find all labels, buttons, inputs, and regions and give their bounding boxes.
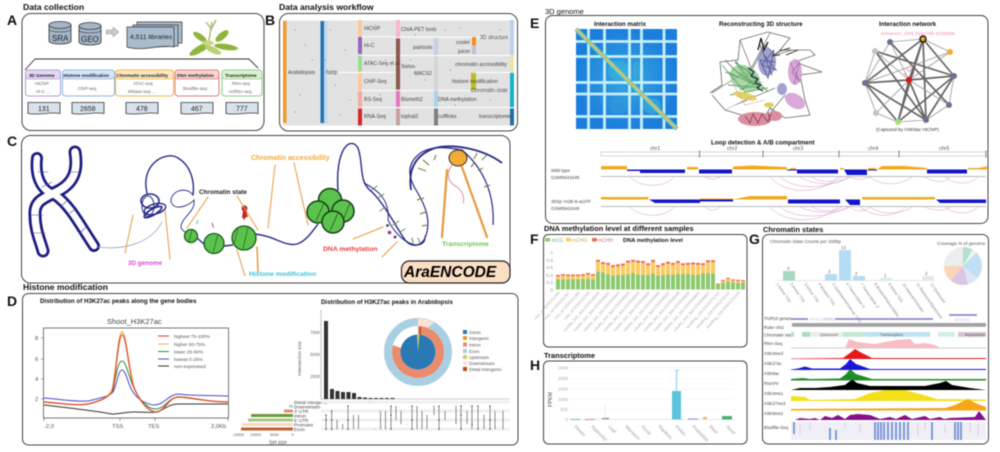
label: chromatin state: Chromatin state [199, 189, 247, 196]
letter B: B [265, 12, 275, 28]
axis labels: 0 [550, 288, 553, 294]
letter E: E [530, 15, 539, 31]
workflow labels: chromatin accessibility [455, 62, 507, 68]
box: chromatin accessibility: ATAC-seq [133, 81, 153, 86]
panel G frame [762, 234, 988, 444]
letter C: C [7, 133, 17, 149]
axis labels: 0.8 [546, 258, 553, 264]
axis labels: 0.2 [546, 280, 553, 286]
H3K27me3 track [791, 399, 986, 410]
workflow labels: tophat2 [401, 114, 418, 120]
bar chart: chromatin state counts: 4 [787, 266, 790, 271]
panel B frame [280, 14, 518, 131]
upset chart: set size bars [233, 400, 328, 446]
workflow labels: BS-Seq [364, 97, 382, 103]
genome browser tracks: Chromatin state [764, 332, 795, 338]
bar chart: chromatin state counts: 2 [925, 271, 928, 276]
track: wild-type compartments and loops: GSM5941648 [551, 175, 580, 180]
bar chart: chromatin state counts: 7 Transcription 3' [859, 282, 881, 310]
heading: histone modification: Histone modification [23, 282, 108, 292]
heading: 3D genome: 3D genome [545, 7, 584, 16]
workflow labels: MACS2 [414, 71, 432, 77]
title: loop detection and compartment: Loop detection & A/B compartment [711, 140, 815, 146]
box: histone modification: ChIP-seq [78, 86, 97, 91]
chromatin state track [791, 332, 986, 337]
box: 3D genome: HiChIP [35, 81, 49, 86]
box: DNA methylation: Bisulfite-seq [183, 86, 207, 91]
donut legend: Upstream [469, 355, 489, 360]
nucleosome cluster [307, 188, 354, 233]
workflow labels: ChIP-Seq [364, 79, 387, 85]
panel E: 3D genome [530, 7, 988, 224]
tissue labels: Pollen [674, 424, 687, 437]
genome browser tracks: H3K9me2 [764, 411, 784, 416]
y axis labels: 1000 [558, 397, 568, 402]
chromatin state track: Transcription [880, 332, 903, 337]
badge: AraENCODE: AraENCODE [403, 264, 497, 281]
upset chart: set size bars: 10000 [250, 432, 262, 437]
genome browser tracks [764, 315, 986, 440]
rotated sample labels: rosette_leaf_3wk GSM346593 [592, 290, 631, 333]
label: DNA methylation: DNA methylation [323, 246, 378, 253]
upset chart: set size bars: Promoter [294, 422, 314, 428]
box: histone modification [62, 70, 114, 96]
box: 3D genome: 3D Genome [29, 73, 55, 78]
sankey flow diagram [283, 20, 514, 126]
rotated sample labels: rosette_leaf_3wk GSM346597 [632, 290, 671, 333]
panel D frame [22, 294, 518, 445]
panel C frame [22, 136, 510, 283]
upset chart: dot matrix [321, 402, 510, 429]
upset chart: set size bars: 5' UTR [294, 418, 309, 423]
upset chart: intersection bars: 5000 [310, 352, 321, 357]
heading: chromatin states: Chromatin states [763, 225, 823, 234]
donut chart: peak annotation [388, 318, 448, 382]
bar chart: chromatin state counts: 1 Active TSS [775, 282, 793, 304]
line chart legend: lower 25-50% [174, 350, 204, 356]
label: chromatin accessibility: Chromatin accessibility [251, 155, 330, 162]
panel C: chromatin schematic [7, 133, 510, 283]
tissue labels [573, 424, 737, 443]
axis labels [546, 250, 553, 294]
title: interaction network: Interaction network [879, 21, 937, 28]
genome browser tracks: TAIR10 genes [764, 316, 791, 321]
letter G: G [749, 231, 760, 247]
line chart legend [158, 334, 211, 370]
panel H: transcriptome [530, 351, 747, 444]
chart title: methylation level: DNA methylation level [623, 238, 683, 244]
genome browser tracks: H3K27ac [764, 361, 783, 366]
tissue labels: Seed [725, 424, 737, 436]
rotated sample labels: rosette_leaf_3wk GSM346594 [602, 290, 641, 333]
rotated sample labels: root_ref GSM151348 [553, 290, 581, 321]
workflow labels [288, 26, 511, 120]
icon: SRA database [49, 22, 71, 44]
rotated sample labels: root_ref GSM151347 [543, 290, 571, 321]
icon: Arabidopsis plant [188, 20, 238, 58]
bar chart: chromatin state counts: 5 Upstream/enhancer TSS [831, 282, 863, 324]
panel G: chromatin states [749, 225, 988, 444]
trapezoid connector [25, 59, 258, 70]
heading: DNA methylation: DNA methylation level at different samples [544, 224, 694, 233]
chart title: Arabidopsis peaks: Distribution of H3K27ac peaks in Arabidopsis [321, 299, 453, 306]
RNAPII track [791, 380, 986, 390]
workflow labels: Chromatin-state [471, 88, 508, 94]
chromosome ruler: chr1 [650, 146, 660, 152]
legend: methylation contexts: mCG [552, 238, 563, 244]
label: transcriptome: Transcriptome [442, 241, 489, 248]
3D structure reconstruction [710, 32, 822, 126]
chart title: gene bodies: Distribution of H3K27ac peaks along the gene bodies [40, 298, 197, 305]
count: 478 [126, 102, 158, 114]
genome browser tracks: H3K27me3 [764, 401, 786, 406]
line chart: Shoot_H3K27ac: 8 [35, 336, 38, 342]
upset chart: set size bars: 15000 [233, 432, 245, 437]
letter H: H [530, 357, 540, 373]
workflow labels: histone modification [452, 79, 498, 85]
workflow labels: HiChIP [364, 26, 381, 32]
histone marks [196, 205, 248, 228]
chromosome ruler: chr5 [939, 146, 949, 152]
workflow labels: juicer [457, 49, 471, 55]
panel B: data analysis workflow [265, 2, 518, 131]
panel A frame [22, 14, 264, 130]
y axis labels: 1500 [558, 386, 568, 392]
y axis labels: 2500 [558, 366, 568, 370]
upset chart: set size bars: 5000 [270, 432, 280, 437]
line chart: Shoot_H3K27ac: TES [148, 424, 159, 430]
chromatin state track: Repression [965, 332, 985, 337]
arrow: databases to libraries [106, 27, 119, 37]
Bisulfite-Seq track [791, 422, 986, 440]
icon: GEO database: GEO [81, 35, 99, 44]
bar chart: chromatin state counts: 8 Bivalent/transcription [873, 282, 900, 318]
upset chart: set size bars: Intron [294, 414, 306, 418]
upset chart: set size bars: 3' UTR [294, 409, 309, 414]
tissue labels: Plantlets [657, 424, 674, 441]
workflow labels: ChIA-PET tools [401, 27, 437, 33]
interaction network graph [862, 36, 957, 125]
H3K9me2 track [795, 411, 986, 420]
bar chart: chromatin state counts: 13 [841, 245, 846, 250]
workflow labels: Bismeth2 [401, 97, 423, 103]
heading: transcriptome: Transcriptome [544, 351, 595, 360]
badge: AraENCODE [402, 261, 510, 283]
H3K9ac track [791, 369, 986, 380]
panel E frame [546, 16, 988, 224]
genome browser tracks: Ruler chr2 [764, 325, 784, 330]
bar chart: chromatin state counts: 3 [828, 269, 831, 274]
rotated sample labels: seedling_10d GSM1375102 [685, 290, 721, 330]
upset chart: set size bars: Distal intergenic [294, 400, 328, 405]
workflow labels: ATAC-Seq et al [364, 61, 399, 67]
line chart: Shoot_H3K27ac: 2,0Kb [211, 424, 226, 430]
tissue labels: Hypocotyl [590, 424, 608, 442]
bar chart: chromatin state counts: 2 [855, 271, 858, 276]
chromosome ruler [601, 146, 986, 158]
letter F: F [530, 231, 539, 247]
track: wild-type compartments and loops [551, 166, 987, 190]
icon: library stack [127, 22, 182, 49]
upset chart: set size bars: Downstream [294, 404, 320, 410]
line chart legend: non-expressed [174, 364, 206, 370]
rotated sample labels: rosette_leaf_3wk GSM346590 [562, 290, 601, 333]
line chart legend: lowest 0-25% [174, 357, 204, 363]
donut legend: Downstream [469, 361, 495, 366]
rotated sample labels: rosette_leaf_3wk GSM346601 [672, 290, 711, 333]
workflow labels: cufflinks [438, 114, 457, 120]
axis labels: 1 [550, 250, 553, 256]
chart title: state counts: Chromatin State Counts per 200bp [770, 239, 841, 244]
heading: data collection: Data collection [23, 2, 84, 12]
tissue labels: Meristem [624, 424, 641, 441]
box: transcriptome [222, 70, 262, 96]
line chart legend: higher 50-75% [174, 342, 206, 348]
bar chart: chromatin state counts: 9 Active TES [887, 282, 905, 304]
count: 2658: 2658 [80, 106, 96, 113]
donut legend: Genic [469, 330, 482, 335]
tissue labels: Root [708, 424, 719, 435]
upset chart: intersection bars [297, 310, 510, 399]
line chart: Shoot_H3K27ac: -2,0 [44, 424, 54, 430]
bar chart: chromatin state counts: 4 Bivalent TSS [817, 282, 837, 306]
H3K27ac track [791, 359, 986, 370]
bar chart: chromatin state counts: 2 Active TSS [789, 282, 807, 304]
donut legend: Exon [469, 349, 480, 354]
rotated sample labels: rosette_leaf_3wk GSM346598 [642, 290, 681, 333]
panel A: data collection [7, 2, 264, 130]
rotated sample labels: seedling_10d GSM1375103 [695, 290, 731, 330]
rotated sample labels: rosette_leaf_3wk GSM346591 [572, 290, 611, 333]
box: DNA methylation: DNA methylation [177, 73, 214, 78]
title: interaction matrix: Interaction matrix [594, 21, 646, 28]
letter A: A [7, 12, 17, 28]
count: 131 [28, 102, 60, 114]
legend: methylation contexts: mCHH [598, 238, 613, 244]
heatmap: interaction matrix [576, 29, 677, 129]
icon: chromosome [31, 152, 94, 251]
title: reconstructing 3D structure: Reconstructing 3D structure [719, 21, 803, 28]
H3K4me1 track [791, 390, 986, 401]
upset chart: intersection bars: 7500 [310, 330, 321, 335]
chromosome ruler: chr4 [868, 146, 878, 152]
rotated sample labels: rosette_leaf_3wk GSM346596 [622, 290, 661, 333]
H3K4me3 track [791, 349, 986, 359]
pie chart: genome coverage [944, 247, 982, 285]
workflow labels: Hi-C [364, 43, 375, 49]
workflow labels: pairtools [413, 45, 433, 51]
gene models: PHYB [825, 316, 836, 322]
network enhancer label: enhancer_chr5:3164789-3165006 [881, 31, 955, 37]
axis labels: 0.4 [546, 273, 553, 279]
gene models: AT2G21 [955, 317, 970, 322]
DNA fibre and 3D loops [98, 156, 194, 248]
axis labels: 0.6 [546, 265, 553, 271]
genome browser tracks: H3K4me1 [764, 391, 784, 396]
donut legend [463, 330, 502, 372]
stacked bar chart: methylation by sample [556, 260, 745, 290]
donut legend: Distal intergenic [469, 367, 502, 372]
count: 467 [181, 102, 213, 114]
ruler track [792, 323, 986, 327]
line chart: Shoot_H3K27ac [35, 317, 228, 430]
box: 3D genome: Hi-C ... [36, 89, 50, 94]
genome browser tracks: Bisulfite-Seq [764, 425, 789, 430]
legend: methylation contexts [545, 238, 613, 244]
rotated sample labels: seedling_10d GSM1375105 [705, 290, 741, 330]
box: transcriptome: RNA-seq [232, 81, 250, 86]
line chart legend: highest 75-100% [174, 334, 211, 340]
workflow labels: 3D structure [480, 35, 508, 41]
genome browser tracks: H3K4me3 [764, 351, 784, 356]
rotated sample labels: rosette_leaf_3wk GSM346595 [612, 290, 651, 333]
count: 777: 777 [236, 106, 248, 113]
legend: methylation contexts: mCHG [572, 238, 587, 244]
label: 3D genome: 3D genome [128, 260, 162, 267]
bar chart: chromatin state counts: 1 [884, 273, 887, 278]
pie title: coverage: Coverage % of genome [937, 241, 986, 246]
box: chromatin accessibility: Chromatin accessibility [116, 73, 169, 78]
bar chart: chromatin state counts: 11 Repressed/quiescent [915, 282, 944, 320]
rotated sample labels: rosette_leaf_3wk GSM346592 [582, 290, 621, 333]
workflow labels: fatdp [326, 70, 338, 76]
panel D: histone modification [7, 282, 518, 446]
count: 467: 467 [191, 106, 203, 113]
chromosome ruler: chr2 [727, 146, 737, 152]
box: histone modification: Histone modification [64, 73, 109, 78]
genome browser tracks: RNA-Seq [764, 341, 783, 346]
y axis labels: 500 [560, 407, 568, 412]
track: 35Sp H2B-8-aGFP compartments and loops [551, 196, 986, 220]
y axis labels: 0 [565, 417, 568, 422]
rotated sample labels: root_ref GSM151346 [533, 290, 561, 321]
tissue labels: Flower [573, 424, 587, 438]
workflow labels: cooler [456, 40, 470, 46]
count: 478: 478 [136, 106, 148, 113]
icon: library stack: 4,511 libraries [130, 34, 173, 41]
panel F frame [544, 234, 747, 347]
network caption: (Captured by H3K9ac HiChIP) [876, 127, 939, 132]
count: 2658 [72, 102, 104, 114]
upset chart: set size bars: Set size [269, 440, 287, 446]
bar chart: chromatin state counts [775, 245, 947, 324]
count: 777 [226, 102, 258, 114]
gene models: AT2G 35782 [810, 316, 833, 322]
line chart: Shoot_H3K27ac: 6 [35, 357, 38, 363]
rotated sample labels: rosette_leaf_3wk GSM346600 [662, 290, 701, 333]
panel H frame [544, 361, 747, 444]
panel F: DNA methylation level [530, 224, 747, 347]
box: DNA methylation [175, 70, 219, 96]
track: wild-type compartments and loops: Wild-type [551, 168, 571, 173]
box: chromatin accessibility: MNase-seq ... [128, 89, 155, 94]
y axis labels: 2000 [558, 376, 568, 381]
count: 131: 131 [38, 106, 50, 113]
box: transcriptome: Transcriptome [225, 73, 257, 78]
bar chart: chromatin state counts: 12 Quiescent [929, 282, 947, 305]
upset chart: intersection bars: Intersection size [297, 341, 303, 376]
tissue labels: Protoplast [691, 424, 710, 443]
bar chart: chromatin state counts: 6 Transcription 5' [845, 282, 867, 310]
donut legend: Intergenic [469, 336, 490, 341]
tissue labels: Ovule [640, 424, 653, 437]
rotated sample labels [533, 290, 741, 333]
y axis labels [558, 366, 568, 422]
rotated sample labels: root_ref GSM151349 [563, 290, 591, 321]
track: 35Sp H2B-8-aGFP compartments and loops: 35Sp::H2B-8-aGFP [551, 199, 591, 204]
gene models [791, 315, 977, 322]
workflow labels: DNA methylation [438, 97, 477, 103]
line chart: Shoot_H3K27ac: 4 [35, 377, 39, 383]
tissue labels: Leaf [607, 424, 618, 435]
RNA-Seq track [791, 339, 986, 348]
track: 35Sp H2B-8-aGFP compartments and loops: GSM5941649 [551, 206, 580, 211]
donut legend: Intron [469, 342, 481, 348]
pointer lines [125, 163, 487, 276]
heading: data analysis workflow: Data analysis workflow [279, 2, 374, 12]
upset chart: set size bars: Exon [294, 427, 305, 432]
nucleosome chain [184, 224, 318, 254]
line chart: Shoot_H3K27ac: 2 [35, 397, 38, 403]
bar chart: FPKM by tissue [570, 368, 735, 420]
icon: SRA database: SRA [52, 34, 69, 43]
workflow labels: Arabidopsis [288, 70, 316, 76]
box: 3D genome [26, 70, 60, 96]
bar chart: chromatin state counts: 10 Heterochromatin [901, 282, 925, 313]
box: chromatin accessibility [116, 70, 174, 96]
workflow labels: Swiss- [401, 64, 417, 70]
genome browser tracks: RNAPII [764, 381, 778, 386]
label: histone modification: Histone modification [249, 271, 316, 278]
workflow labels: transcriptome [479, 114, 511, 120]
DNA helix with methylation [338, 143, 425, 245]
chromosome ruler: chr3 [793, 146, 803, 152]
bar chart: chromatin state counts: 3 Active TSS [803, 282, 821, 304]
letter D: D [7, 293, 17, 309]
line chart: Shoot_H3K27ac: Shoot_H3K27ac [107, 317, 162, 326]
workflow labels: RNA-Seq [364, 114, 386, 120]
chromatin state track: Quiescent [820, 332, 839, 337]
rotated sample labels: rosette_leaf_3wk GSM346599 [652, 290, 691, 333]
line chart: Shoot_H3K27ac: TSS [112, 424, 123, 430]
icon: GEO database [79, 22, 101, 45]
upset chart: set size bars: 0 [292, 432, 294, 437]
upset chart: intersection bars: 2500 [310, 374, 321, 379]
y axis title: FPKM [548, 392, 554, 407]
box: transcriptome: ncRNA-seq [229, 89, 252, 94]
transcription bubble [410, 146, 502, 240]
genome browser tracks: H3K9ac [764, 371, 780, 376]
